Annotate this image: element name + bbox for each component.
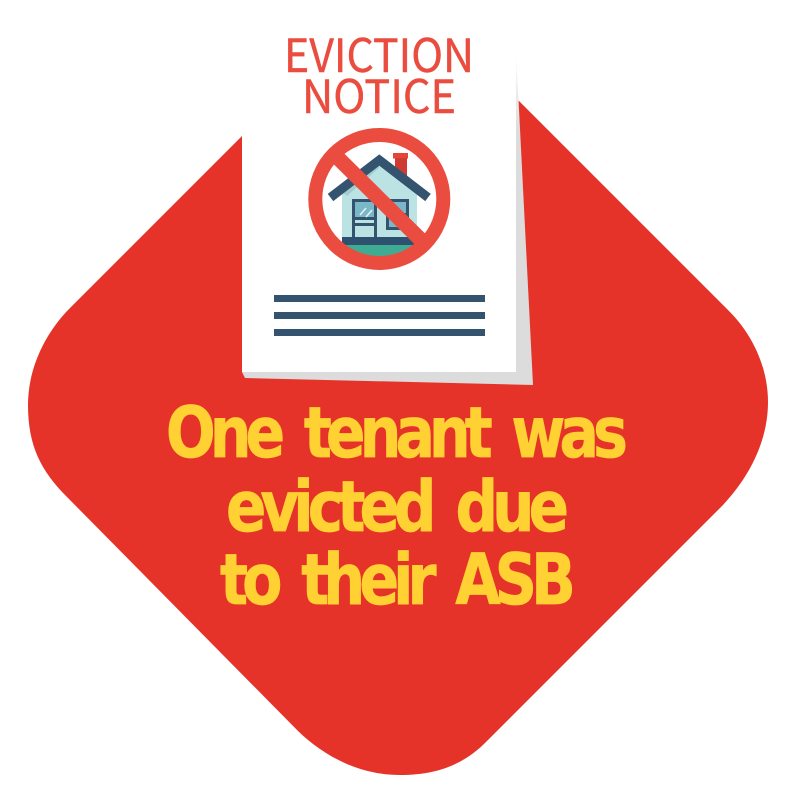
prohibition ring and slash [315,135,443,263]
icon: prohibited house [315,135,443,265]
headline text: evicted due [226,466,567,548]
headline text [166,392,626,621]
paper shadow [242,50,533,385]
document heading: NOTICE [302,61,456,127]
headline text: One tenant was [166,392,626,474]
eviction notice document [242,20,533,385]
headline text: to their ASB [220,539,572,621]
document heading [284,20,474,127]
paper sheet [242,20,516,372]
house illustration [330,153,430,265]
document text lines [274,295,485,336]
document heading: EVICTION [284,20,474,86]
